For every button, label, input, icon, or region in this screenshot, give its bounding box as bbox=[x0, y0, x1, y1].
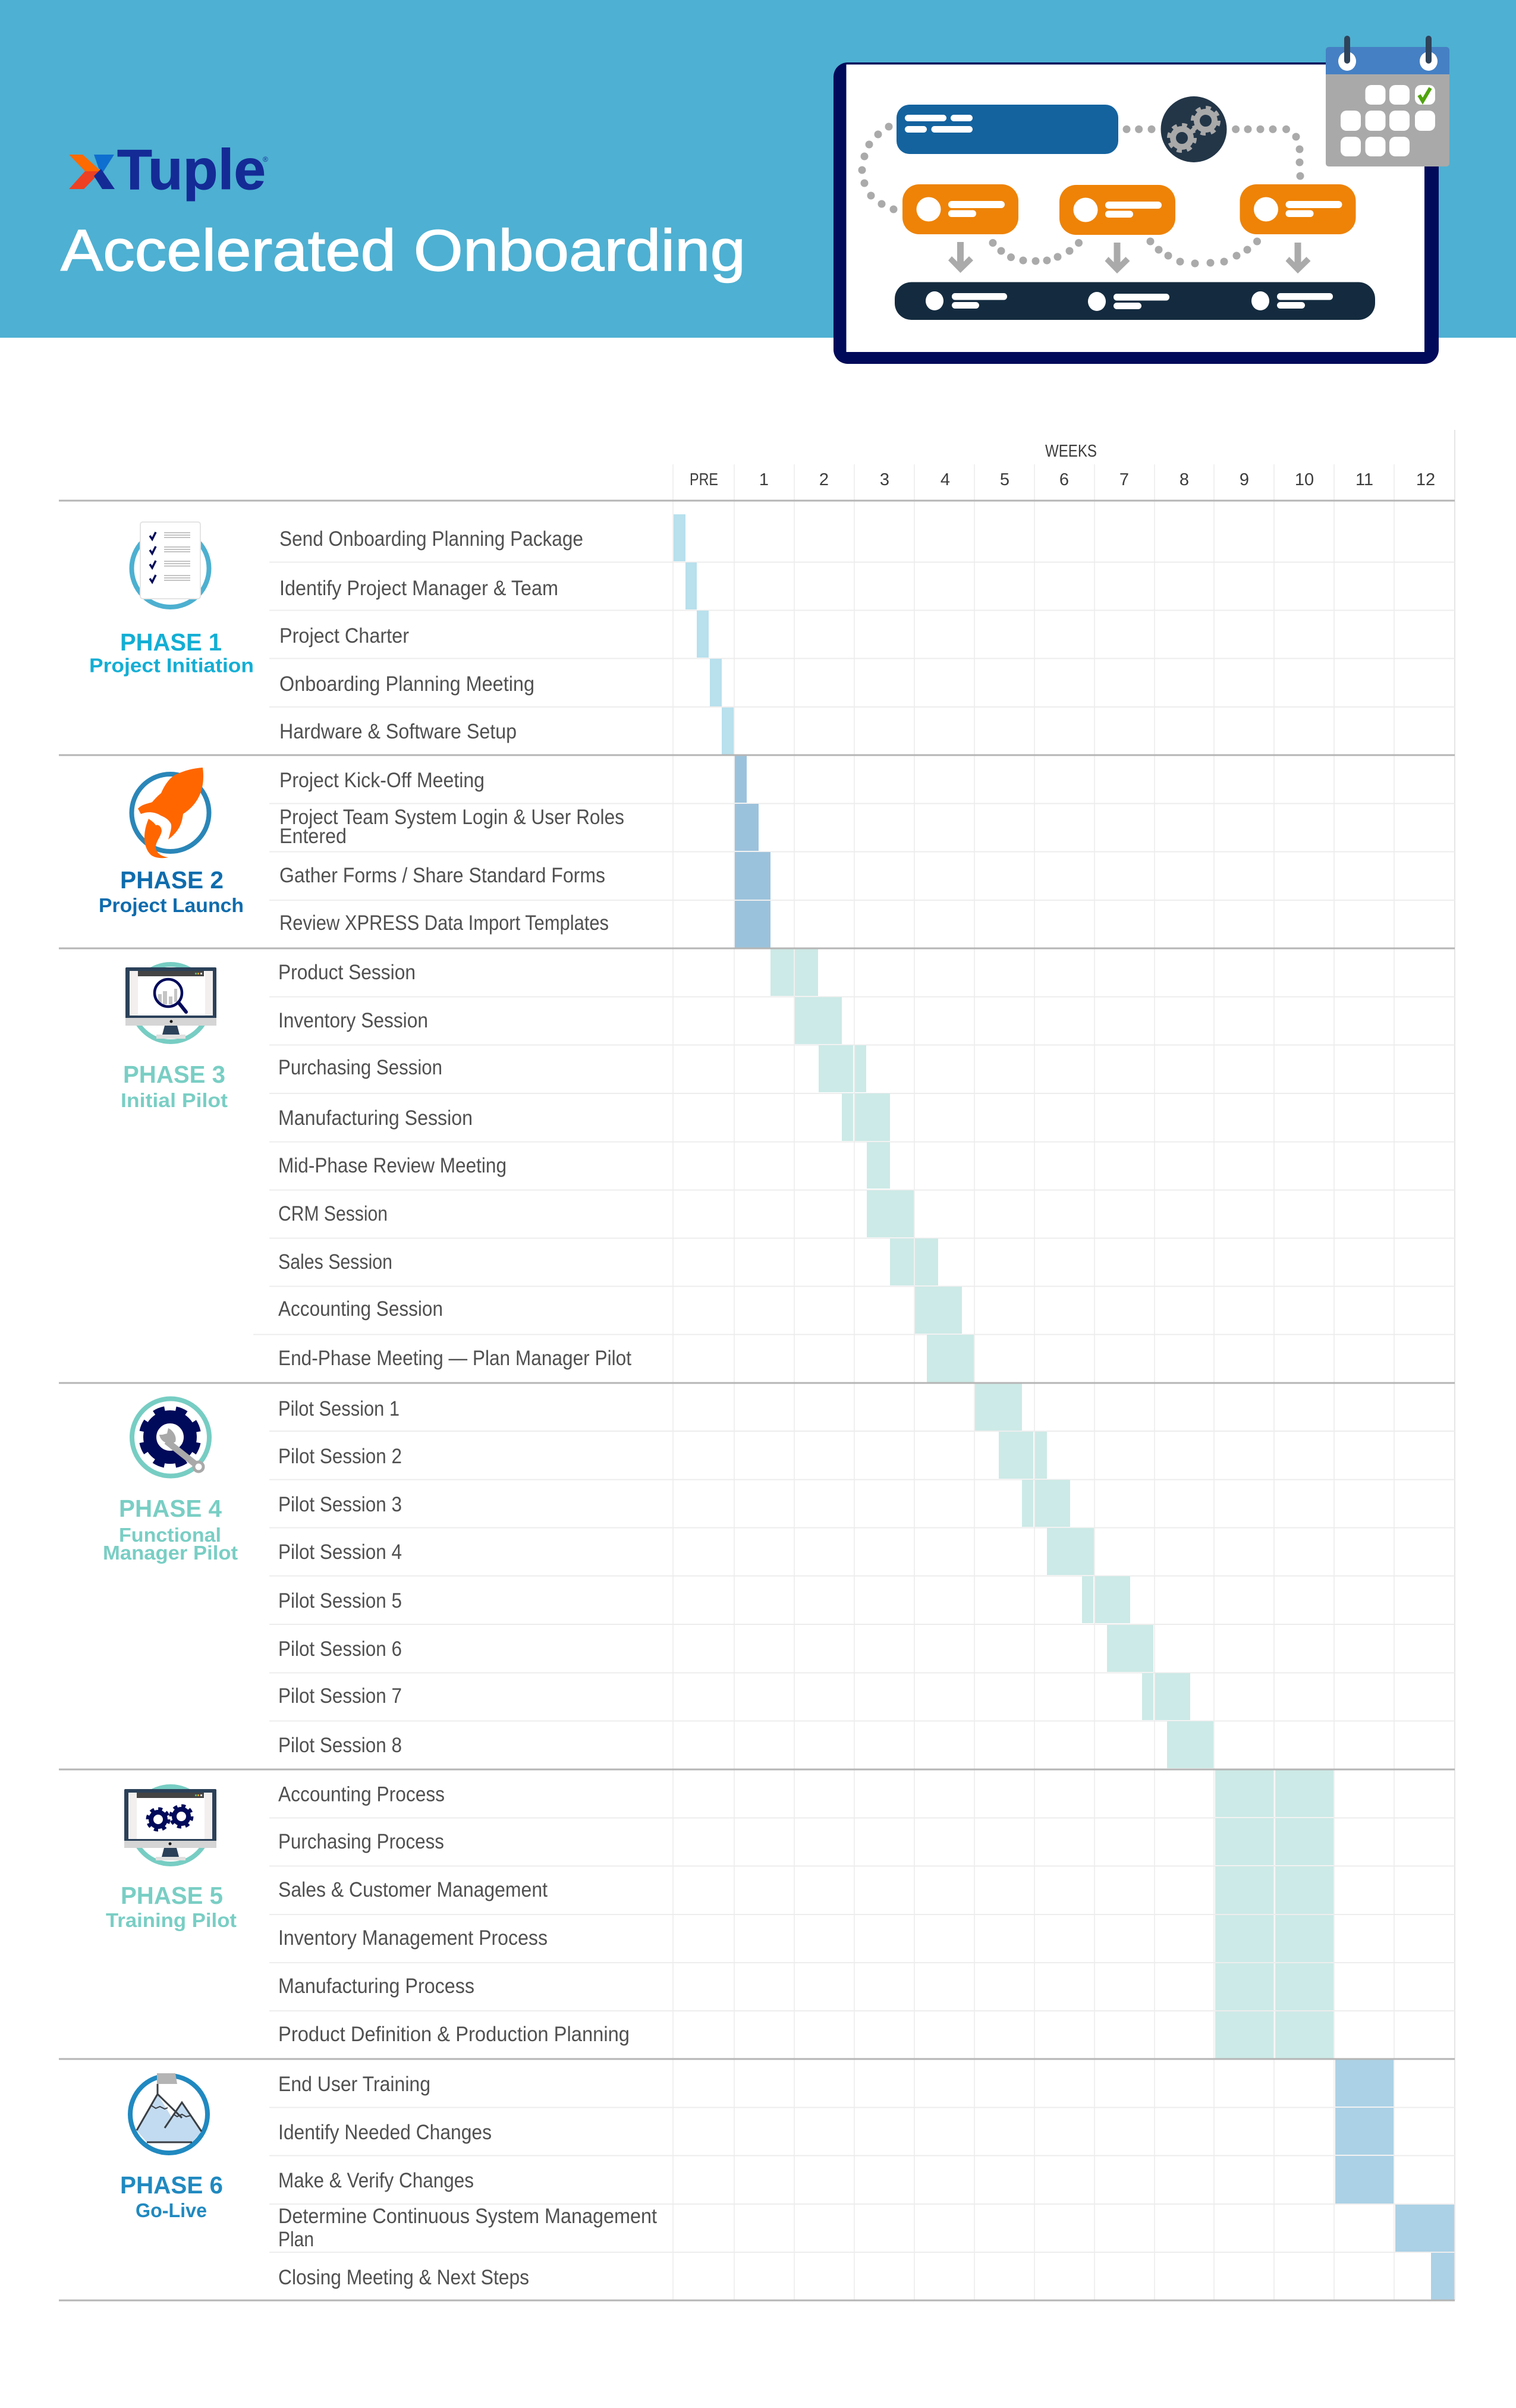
board frame bbox=[834, 62, 1439, 364]
panel: phase 6 label: PHASE 6 bbox=[120, 2171, 223, 2199]
task list: phase 5: Purchasing Process bbox=[278, 1830, 444, 1853]
illustration: onboarding process board bbox=[834, 36, 1449, 364]
task list: phase 1: Hardware & Software Setup bbox=[279, 720, 517, 743]
task list: phase 4: Pilot Session 5 bbox=[278, 1589, 402, 1612]
task list: phase 6: End User Training bbox=[278, 2073, 430, 2096]
task list: phase 4: Pilot Session 6 bbox=[278, 1637, 402, 1661]
task list: phase 6: Plan bbox=[278, 2228, 314, 2251]
icon: monitor with magnifier bbox=[125, 964, 216, 1042]
panel: phase 1 label bbox=[89, 522, 254, 677]
task list: phase 1: Send Onboarding Planning Package bbox=[279, 527, 583, 551]
task list: phase 3 bbox=[278, 961, 631, 1370]
task list: phase 4: Pilot Session 8 bbox=[278, 1734, 402, 1757]
header band bbox=[0, 0, 1516, 338]
panel: phase 2 label: PHASE 2 bbox=[120, 866, 224, 894]
logo: xTuple: Tuple bbox=[117, 138, 266, 202]
gantt bars: phase 2 bbox=[735, 756, 770, 948]
icon: checklist bbox=[132, 522, 209, 607]
icon: rocket bbox=[132, 768, 209, 858]
chart header: weeks: 8 bbox=[1180, 470, 1189, 489]
panel: phase 3 label bbox=[121, 964, 228, 1111]
panel: phase 2 label bbox=[99, 768, 244, 916]
phase divider lines bbox=[59, 499, 1455, 2301]
task list: phase 3: Purchasing Session bbox=[278, 1056, 442, 1079]
chart header: weeks: 9 bbox=[1240, 470, 1249, 489]
task list: phase 4: Pilot Session 2 bbox=[278, 1445, 402, 1468]
task list: phase 5: Sales & Customer Management bbox=[278, 1878, 548, 1901]
orange box 2 bbox=[1059, 185, 1175, 235]
chart header: weeks: 10 bbox=[1295, 470, 1314, 489]
task list: phase 3: Accounting Session bbox=[278, 1297, 443, 1321]
chart header: weeks: 6 bbox=[1059, 470, 1069, 489]
panel: phase 6 label bbox=[120, 2073, 223, 2221]
task list: phase 3: CRM Session bbox=[278, 1202, 388, 1225]
task list: phase 6: Identify Needed Changes bbox=[278, 2121, 492, 2144]
logo: xTuple: ® bbox=[263, 155, 268, 164]
task list: phase 6: Determine Continuous System Management bbox=[278, 2205, 657, 2228]
task list: phase 5 bbox=[278, 1783, 630, 2046]
chart header: weeks: 1 bbox=[759, 470, 769, 489]
task list: phase 1: Identify Project Manager & Team bbox=[279, 577, 558, 600]
chart grid bbox=[253, 430, 1455, 2300]
task list: phase 2: Entered bbox=[279, 825, 347, 848]
panel: phase 4 label bbox=[103, 1398, 238, 1564]
chart header: weeks: 2 bbox=[819, 470, 829, 489]
panel: phase 3 label: PHASE 3 bbox=[123, 1061, 225, 1088]
panel: phase 5 label bbox=[106, 1787, 237, 1931]
chart header: weeks: 4 bbox=[941, 470, 950, 489]
task list: phase 2: Review XPRESS Data Import Templates bbox=[279, 911, 609, 935]
task list: phase 1 bbox=[279, 527, 583, 743]
task list: phase 5: Accounting Process bbox=[278, 1783, 445, 1806]
dotted connectors bbox=[858, 122, 1304, 268]
task list: phase 2: Project Kick-Off Meeting bbox=[279, 769, 485, 792]
gantt bars: phase 4 bbox=[975, 1384, 1213, 1768]
chart header: weeks: PRE bbox=[690, 470, 718, 489]
gantt bars: phase 1 bbox=[674, 514, 734, 755]
task list: phase 2: Gather Forms / Share Standard Forms bbox=[279, 864, 605, 887]
icon: gears circle bbox=[1160, 96, 1227, 162]
task list: phase 6: Make & Verify Changes bbox=[278, 2169, 474, 2192]
panel: phase 1 label: PHASE 1 bbox=[120, 628, 222, 656]
chart header: weeks: 11 bbox=[1355, 470, 1373, 489]
task list: phase 4 bbox=[278, 1397, 402, 1757]
panel: phase 4 label: Functional bbox=[119, 1524, 221, 1546]
chart header: weeks: 12 bbox=[1416, 470, 1435, 489]
icon: gear with wrench bbox=[132, 1398, 209, 1476]
gantt bars: phase 5 bbox=[1215, 1770, 1333, 2058]
dark results pill bbox=[895, 282, 1375, 320]
panel: phase 4 label: Manager Pilot bbox=[103, 1542, 238, 1564]
orange box 1 bbox=[902, 184, 1018, 234]
task list: phase 3: Mid-Phase Review Meeting bbox=[278, 1154, 507, 1177]
panel: phase 1 label: Project Initiation bbox=[89, 654, 254, 677]
task list: phase 2 bbox=[279, 769, 624, 935]
chart header: weeks: 5 bbox=[1000, 470, 1009, 489]
task list: phase 2: Project Team System Login & User Roles bbox=[279, 806, 624, 829]
icon: monitor with gears bbox=[124, 1787, 216, 1864]
panel: phase 3 label: Initial Pilot bbox=[121, 1089, 228, 1111]
task list: phase 5: Product Definition & Production Planning bbox=[278, 2023, 630, 2046]
task list: phase 1: Onboarding Planning Meeting bbox=[279, 672, 534, 696]
task list: phase 3: Manufacturing Session bbox=[278, 1106, 473, 1130]
blue header box bbox=[897, 105, 1118, 154]
gantt bars: phase 3 bbox=[770, 949, 974, 1382]
task list: phase 6 bbox=[278, 2073, 657, 2289]
chart header: weeks: 7 bbox=[1119, 470, 1129, 489]
task list: phase 3: End-Phase Meeting — Plan Manager Pilot bbox=[278, 1347, 631, 1370]
panel: phase 6 label: Go-Live bbox=[136, 2199, 207, 2221]
icon: calendar bbox=[1326, 36, 1449, 166]
chart header: weeks: 3 bbox=[880, 470, 889, 489]
gantt bars: phase 6 bbox=[1335, 2060, 1454, 2300]
task list: phase 3: Product Session bbox=[278, 961, 416, 984]
chart header: weeks bbox=[690, 442, 1435, 489]
panel: phase 2 label: Project Launch bbox=[99, 894, 244, 916]
task list: phase 5: Manufacturing Process bbox=[278, 1975, 474, 1998]
panel: phase 5 label: Training Pilot bbox=[106, 1909, 237, 1931]
panel: phase 4 label: PHASE 4 bbox=[119, 1495, 222, 1522]
task list: phase 3: Sales Session bbox=[278, 1250, 392, 1274]
task list: phase 5: Inventory Management Process bbox=[278, 1926, 548, 1950]
task list: phase 4: Pilot Session 4 bbox=[278, 1541, 402, 1564]
orange box 3 bbox=[1240, 184, 1355, 234]
icon: mountain with flag bbox=[130, 2073, 207, 2153]
arrows down bbox=[948, 242, 1310, 274]
chart header: weeks: WEEKS bbox=[1045, 442, 1097, 461]
panel: phase 5 label: PHASE 5 bbox=[121, 1882, 223, 1909]
task list: phase 4: Pilot Session 7 bbox=[278, 1684, 402, 1708]
task list: phase 6: Closing Meeting & Next Steps bbox=[278, 2266, 529, 2289]
task list: phase 1: Project Charter bbox=[279, 624, 409, 647]
task list: phase 4: Pilot Session 1 bbox=[278, 1397, 400, 1420]
task list: phase 3: Inventory Session bbox=[278, 1009, 428, 1032]
title: Accelerated Onboarding bbox=[61, 218, 746, 283]
task list: phase 4: Pilot Session 3 bbox=[278, 1493, 402, 1516]
